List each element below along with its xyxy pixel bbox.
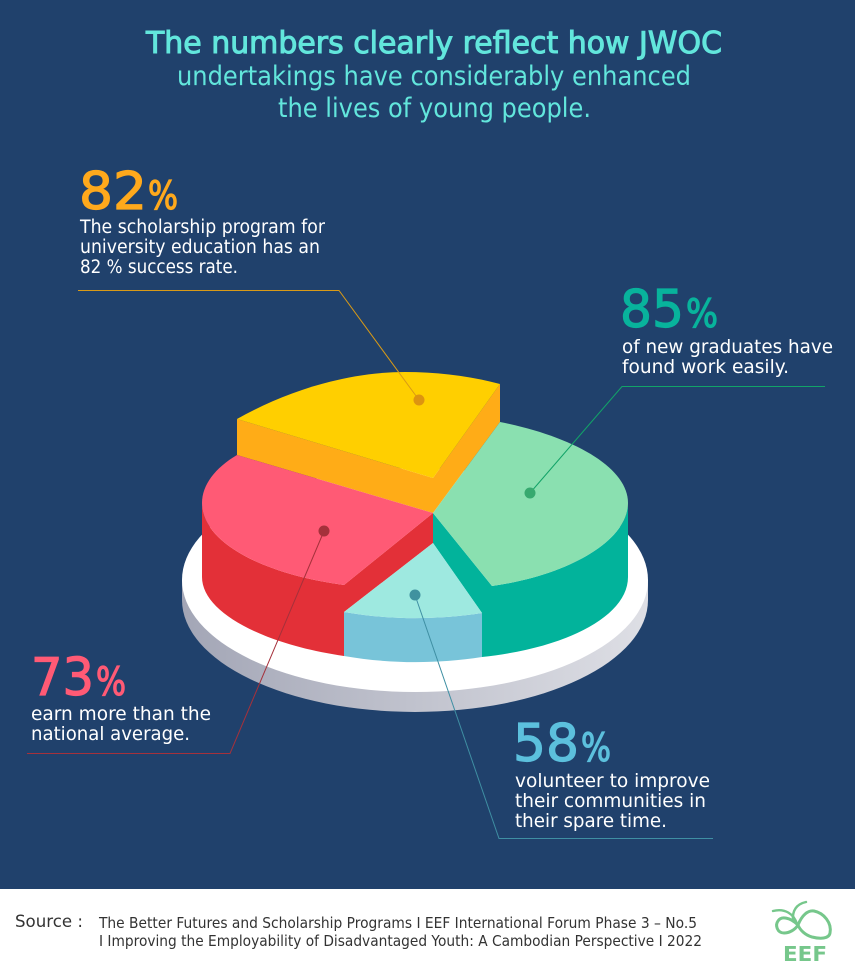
callout: 82%: 82 xyxy=(79,162,147,222)
callout: 73%: % xyxy=(96,660,126,705)
callout: 73%: 73 xyxy=(31,648,94,708)
callout: 58%: % xyxy=(581,726,611,771)
slice: 73% red xyxy=(202,455,433,656)
callout: 82% xyxy=(78,162,424,406)
slice: 85% green xyxy=(433,422,628,657)
callout: 85%: of new graduates have xyxy=(622,336,833,358)
callout: 73% xyxy=(27,526,330,754)
EEF logo xyxy=(773,902,830,966)
callout: 58%: their spare time. xyxy=(515,810,667,832)
footer band xyxy=(0,889,855,979)
callout: 58%: volunteer to improve xyxy=(515,770,710,792)
pie chart xyxy=(182,372,648,712)
callout: 82%: % xyxy=(148,174,178,219)
callout: 82%: The scholarship program for xyxy=(79,217,325,238)
slice: 82% yellow xyxy=(237,372,500,513)
callout: 58% xyxy=(410,590,716,838)
slice: 58% blue xyxy=(344,543,482,662)
white base platform xyxy=(182,468,648,712)
callout: 73%: national average. xyxy=(31,723,190,745)
callout: 73%: earn more than the xyxy=(31,703,211,725)
callout: 85%: 85 xyxy=(620,280,684,340)
callout: 82%: 82 % success rate. xyxy=(80,257,238,278)
callout: 85%: % xyxy=(686,292,718,337)
title xyxy=(145,26,722,124)
title: the lives of young people. xyxy=(278,93,591,124)
callout: 85%: found work easily. xyxy=(622,356,789,378)
title: The numbers clearly reflect how JWOC xyxy=(145,26,722,61)
title: undertakings have considerably enhanced xyxy=(177,61,691,92)
EEF logo: EEF xyxy=(783,942,827,966)
callout: 58%: their communities in xyxy=(515,790,706,812)
source citation: The Better Futures and Scholarship Programs I EEF International Forum Phase 3 – No.5 xyxy=(98,914,697,932)
callout: 58%: 58 xyxy=(513,714,579,774)
source citation: I Improving the Employability of Disadvantaged Youth: A Cambodian Perspective I 2022 xyxy=(99,932,702,950)
callout: 85% xyxy=(524,280,839,498)
callout: 82%: university education has an xyxy=(80,237,320,258)
source label: Source : xyxy=(15,912,83,932)
